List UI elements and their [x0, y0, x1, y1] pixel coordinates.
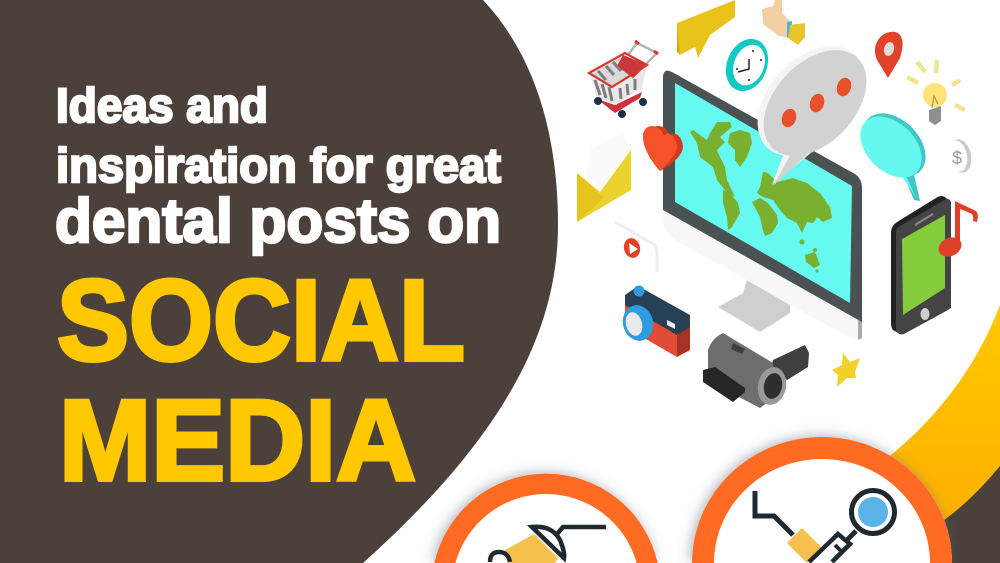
icon: red heart: [643, 126, 683, 171]
icon: teal speech bubble: [849, 101, 938, 201]
icon: dental mirror in orange ring: [692, 437, 952, 563]
heading line: dental posts on: dental posts on: [55, 187, 501, 256]
icon: red map pin: [875, 32, 903, 78]
monitor group: [663, 71, 862, 340]
lamp beam: [505, 534, 558, 563]
yellow grip: [789, 530, 820, 561]
orange ring: [692, 437, 952, 563]
monitor stand: [718, 280, 790, 332]
monitor chin: [663, 205, 862, 340]
mirror head: [852, 490, 894, 534]
heading line: inspiration for great: inspiration for great: [56, 140, 501, 193]
icon: dollar coin: [944, 137, 974, 175]
white disc with shadow: [434, 474, 658, 563]
icon: envelope: [577, 132, 631, 222]
icon: light bulb: [907, 60, 965, 125]
icon: dental lamp in orange ring: [434, 474, 658, 563]
icon: music note: [935, 201, 978, 260]
probe wire: [755, 491, 793, 535]
icon: shopping cart: [589, 41, 658, 118]
icon: star: [832, 353, 860, 387]
monitor screen: [675, 83, 852, 303]
icon: phone: [891, 196, 951, 334]
icon: dollar coin: $: [952, 148, 962, 168]
decorative yellow band: [885, 305, 1000, 525]
orange ring: [434, 474, 658, 563]
title block: [55, 80, 501, 505]
icon: teal clock: [718, 32, 776, 98]
red dots: [779, 107, 799, 129]
monitor frame: [663, 71, 862, 322]
heading line: Ideas and: Ideas and: [56, 80, 268, 133]
heading: SOCIAL: SOCIAL: [57, 257, 465, 385]
lamp outline: [490, 527, 606, 562]
mirror handle: [846, 531, 856, 541]
heading: MEDIA: MEDIA: [59, 377, 416, 505]
white disc with shadow: [692, 437, 952, 563]
world map: [690, 122, 832, 272]
panel: dark brown title shape: [0, 0, 558, 563]
icon: yellow speech bubble: [677, 0, 735, 58]
icon: thumbs up: [762, 0, 805, 45]
icon: video card with play button: [615, 222, 657, 272]
dark corner shape: [930, 466, 1000, 563]
icon: video camera: [703, 333, 809, 408]
icon: large grey speech bubble: [737, 26, 887, 186]
icon: photo camera: [619, 286, 690, 357]
